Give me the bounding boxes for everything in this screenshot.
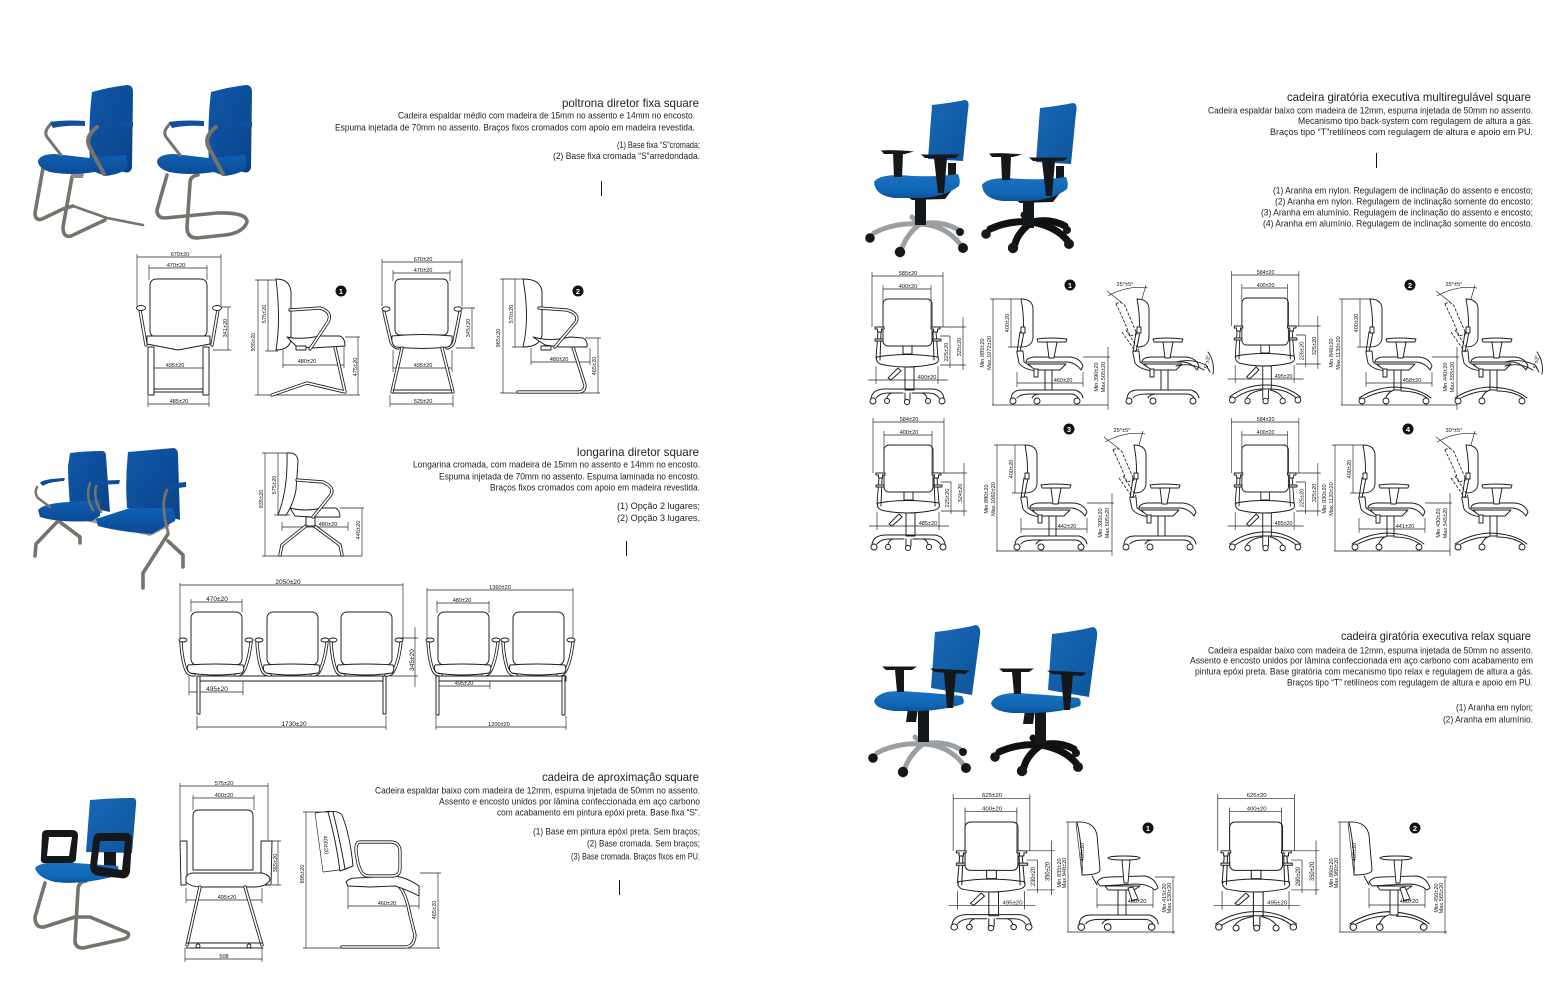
- badge relax 2: [1410, 822, 1420, 834]
- side view 2: Max.555±20: [1450, 362, 1456, 392]
- title: cadeira de aproximação square: [542, 770, 699, 784]
- technical drawing: side view: 400±20: [321, 835, 329, 854]
- badge: option 1: 1: [339, 287, 343, 296]
- badge relax 2: 2: [1413, 824, 1417, 833]
- side view 3: [984, 445, 1114, 556]
- options list: [1443, 702, 1533, 724]
- badge 2: [1404, 280, 1416, 290]
- options list: (1) Aranha em nylon. Regulagem de inclinação do assento e encosto;: [1273, 186, 1533, 196]
- front view 1: 400±20: [899, 284, 917, 290]
- recline view 4: 30°±5°: [1446, 428, 1462, 434]
- panel: cadeira giratória executiva multiregulável square: [865, 90, 1542, 556]
- photo: two-seat beam chair: [35, 448, 186, 588]
- technical drawing: side view: 935±20: [259, 490, 265, 508]
- photo: relax chair with nylon base: [990, 627, 1097, 776]
- title: cadeira giratória executiva relax square: [1341, 629, 1531, 643]
- technical drawing: side view: 465±20: [432, 901, 438, 919]
- side view 1: [980, 299, 1110, 410]
- side view 2: Max.1130±20: [1336, 336, 1342, 370]
- front view 1: 490±20: [918, 375, 936, 381]
- front view 2: 226±20: [1300, 342, 1306, 360]
- front view 3: 400±20: [900, 430, 918, 436]
- technical drawing: three-seat front view: 470±20: [206, 596, 228, 603]
- front view 4: 225±20: [1300, 489, 1306, 507]
- technical drawing: front view: 365±20: [273, 854, 279, 872]
- badge relax 1: 1: [1146, 824, 1150, 833]
- badge 2: 2: [1408, 281, 1412, 290]
- panel: longarina diretor square: [35, 445, 700, 730]
- front view 1: 585±20: [899, 271, 917, 277]
- badge 3: [1064, 424, 1074, 434]
- side view relax 2: Max.565±20: [1439, 883, 1445, 913]
- front view 2: 400±20: [1257, 283, 1274, 289]
- photo: swivel chair with nylon base: [981, 103, 1077, 253]
- recline view 4: [1436, 428, 1528, 550]
- technical drawing: front view, option 2: [382, 257, 475, 407]
- front view relax 1: 400±20: [982, 807, 1003, 813]
- technical drawing: front view, option 2: 470±20: [414, 268, 432, 274]
- technical drawing: front view: 508: [219, 954, 229, 960]
- description: com acabamento em pintura epóxi preta. Base fixa “S”.: [497, 808, 700, 818]
- options list: [553, 140, 700, 161]
- technical drawing: two-seat front view: 495±20: [455, 681, 473, 687]
- front view 2: 325±20: [1312, 337, 1318, 355]
- technical drawing: two-seat front view: 1360±20: [489, 585, 511, 591]
- side view 4: 400±20: [1347, 460, 1353, 478]
- options list: (2) Base cromada. Sem braços;: [587, 838, 700, 848]
- side view 4: Max.545±20: [1443, 508, 1449, 538]
- drawing set: option 3: [869, 417, 1196, 556]
- front view 1: 325±20: [957, 338, 963, 356]
- badge 4: [1402, 424, 1414, 434]
- side view relax 2: 400±20: [1352, 843, 1358, 861]
- recline view 3: [1104, 428, 1196, 550]
- technical drawing: two-seat front view: [426, 585, 575, 730]
- front view relax 1: [949, 793, 1055, 931]
- front view relax 2: 280±20: [1296, 866, 1302, 886]
- options list: (3) Aranha em alumínio. Regulagem de inclinação do assento e encosto;: [1261, 208, 1533, 218]
- side view relax 1: 400±20: [1080, 843, 1086, 861]
- front view relax 1: 350±20: [1045, 861, 1051, 881]
- recline view 2: [1436, 282, 1542, 404]
- description: Cadeira espaldar médio com madeira de 15mm no assento e 14mm no encosto.: [398, 110, 695, 120]
- title: longarina diretor square: [577, 445, 699, 459]
- front view relax 2: [1213, 793, 1319, 931]
- side view 1: 460±20: [1054, 378, 1072, 384]
- panel: poltrona diretor fixa square: [35, 85, 700, 407]
- photo: swivel chair with aluminium base: [865, 100, 969, 257]
- side view relax 2: Max.980±20: [1334, 858, 1340, 888]
- description: pintura epóxi preta. Base giratória com mecanismo tipo relax e regulagem de altura a gás.: [1195, 666, 1533, 676]
- photo: visitor chair with black loop arms: [35, 798, 136, 948]
- front view 4: [1228, 417, 1321, 551]
- badge: option 1: [336, 286, 346, 296]
- front view 4: 584±20: [1257, 417, 1274, 423]
- badge relax 1: [1142, 822, 1154, 834]
- front view relax 2: 625±20: [1247, 793, 1267, 799]
- front view relax 1: 495±20: [1003, 900, 1023, 906]
- description: Espuma injetada de 70mm no assento. Espuma laminada no encosto.: [439, 472, 700, 482]
- badge 1: 1: [1068, 281, 1072, 290]
- technical drawing: side view, option 1: 475±20: [353, 358, 359, 376]
- side view 2: Min.440±20: [1443, 362, 1449, 392]
- technical drawing: side view: 575±20: [272, 476, 278, 494]
- options list: (4) Aranha em alumínio. Regulagem de inclinação somente do encosto.: [1263, 218, 1533, 228]
- options list: (3) Base cromada. Braços fixos em PU.: [571, 852, 700, 862]
- side view 2: [1329, 299, 1459, 410]
- description: Assento e encosto unidos por lâmina confeccionada em aço carbono: [439, 796, 700, 806]
- description: Cadeira espaldar baixo com madeira de 12mm, espuma injetada de 50mm no assento.: [375, 786, 700, 796]
- technical drawing: side view: 445±20: [356, 521, 362, 539]
- side view relax 2: 460±20: [1400, 899, 1418, 905]
- technical drawing: side view: [259, 453, 364, 556]
- description: Longarina cromada, com madeira de 15mm no assento e 14mm no encosto.: [413, 460, 700, 470]
- front view relax 2: 400±20: [1247, 807, 1267, 813]
- recline view 1: 25°±5°: [1117, 282, 1133, 288]
- technical drawing: side view, option 1: 935±20: [251, 333, 257, 351]
- technical drawing: front view: [180, 781, 281, 962]
- technical drawing: side view, option 1: [251, 279, 360, 395]
- technical drawing: front view: 400±20: [215, 793, 233, 799]
- side view 2: 458±20: [1403, 378, 1421, 384]
- technical drawing: side view: 895±20: [300, 865, 306, 883]
- side view 4: [1322, 445, 1452, 556]
- technical drawing: two-seat front view: 480±20: [453, 598, 471, 604]
- side view 3: 442±20: [1058, 524, 1076, 530]
- front view 3: 584±20: [900, 417, 918, 423]
- description: Espuma injetada de 70mm no assento. Braços fixos cromados com apoio em madeira revestida.: [335, 122, 695, 132]
- side view relax 2: Min.860±20: [1329, 858, 1335, 888]
- description: Assento e encosto unidos por lâmina confeccionada em aço carbono com acabamento em: [1190, 656, 1533, 666]
- technical drawing: front view, option 1: [136, 252, 231, 407]
- side view 2: 400±20: [1354, 314, 1360, 332]
- side view 3: Min.395±20: [1098, 508, 1104, 538]
- technical drawing: front view, option 1: 670±20: [171, 252, 189, 258]
- technical drawing: two-seat front view: 1200±20: [488, 722, 510, 728]
- technical drawing: side view, option 1: 480±20: [298, 359, 316, 365]
- technical drawing: front view, option 2: 345±20: [466, 319, 472, 337]
- side view 4: Min.930±20: [1322, 484, 1328, 514]
- technical drawing: side view, option 2: 465±20: [592, 357, 598, 375]
- side view 3: Max.1060±20: [991, 482, 997, 516]
- description: Mecanismo tipo back-system com regulagem de altura a gás.: [1298, 116, 1533, 126]
- technical drawing: side view: 460±20: [378, 901, 396, 907]
- front view 3: 485±20: [919, 521, 937, 527]
- recline view 1: [1107, 282, 1213, 404]
- side view 1: Min.390±20: [1094, 362, 1100, 392]
- side view 1: Max.1072±20: [987, 336, 993, 370]
- badge: option 2: 2: [576, 287, 580, 296]
- technical drawing: side view, option 2: [496, 279, 601, 393]
- description: Braços tipo “T”retilíneos com regulagem de altura e apoio em PU.: [1270, 127, 1533, 137]
- drawing set: option 1: [868, 271, 1213, 410]
- title: poltrona diretor fixa square: [562, 96, 699, 110]
- options list: (1) Base fixa “S”cromada;: [617, 140, 700, 150]
- side view 1: 400±20: [1005, 314, 1011, 332]
- front view relax 1: 230±20: [1031, 866, 1037, 886]
- technical drawing: side view, option 1: 575±20: [262, 305, 268, 323]
- badge: option 2: [572, 286, 584, 296]
- front view 3: 324±20: [958, 484, 964, 502]
- photo: chair with S base: [35, 85, 143, 236]
- badge 1: [1064, 280, 1076, 290]
- description: [413, 460, 700, 492]
- front view relax 1: 625±20: [982, 793, 1003, 799]
- technical drawing: front view, option 2: 495±20: [414, 363, 432, 369]
- technical drawing: side view: [300, 811, 441, 948]
- technical drawing: side view: 480±20: [319, 522, 337, 528]
- front view 3: 225±20: [945, 489, 951, 507]
- side view 4: 441±20: [1396, 524, 1414, 530]
- options list: (2) Base fixa cromada “S”arredondada.: [553, 151, 700, 161]
- technical drawing: side view, option 2: 480±20: [550, 357, 568, 363]
- technical drawing: front view, option 2: 525±20: [414, 399, 432, 405]
- front view 2: 584±20: [1257, 270, 1274, 276]
- options list: (2) Opção 3 lugares.: [617, 513, 700, 523]
- description: Braços tipo “T” retilíneos com regulagem de altura e apoio em PU.: [1287, 678, 1533, 688]
- technical drawing: front view, option 2: 670±20: [414, 257, 432, 263]
- technical drawing: front view: 495±20: [218, 895, 236, 901]
- front view 2: [1228, 270, 1321, 404]
- technical drawing: three-seat front view: [179, 579, 418, 730]
- front view 1: 225±20: [944, 343, 950, 361]
- side view 3: 400±20: [1009, 460, 1015, 478]
- options list: (1) Opção 2 lugares;: [617, 501, 700, 511]
- technical drawing: front view, option 1: 485±20: [170, 399, 188, 405]
- front view relax 2: 350±20: [1310, 861, 1316, 881]
- options list: (2) Aranha em alumínio.: [1443, 714, 1533, 724]
- title: cadeira giratória executiva multiregulável square: [1287, 90, 1531, 104]
- side view relax 1: Min.835±20: [1057, 858, 1063, 888]
- side view relax 1: Max.948±20: [1062, 858, 1068, 888]
- options list: [617, 501, 700, 523]
- options list: (1) Base em pintura epóxi preta. Sem braços;: [533, 826, 700, 836]
- front view 4: 325±20: [1312, 484, 1318, 502]
- panel: cadeira de aproximação square: [35, 770, 700, 962]
- recline view 2: 25°±5°: [1446, 282, 1462, 288]
- description: Cadeira espaldar baixo com madeira de 12mm, espuma injetada de 50mm no assento.: [1208, 106, 1533, 116]
- technical drawing: front view, option 1: 495±20: [166, 363, 184, 369]
- drawing set: option 2: [1228, 270, 1542, 410]
- side view relax 1: Min.415±20: [1162, 883, 1168, 913]
- front view 4: 400±20: [1257, 430, 1274, 436]
- side view 1: Min.885±20: [980, 338, 986, 368]
- description: Cadeira espaldar baixo com madeira de 12mm, espuma injetada de 50mm no assento.: [1208, 646, 1533, 656]
- badge 4: 4: [1406, 425, 1411, 434]
- options list: (2) Aranha em nylon. Regulagem de inclinação somente do encosto;: [1275, 196, 1533, 206]
- technical drawing: three-seat front view: 495±20: [206, 686, 228, 693]
- description: [1208, 106, 1533, 137]
- badge 3: 3: [1067, 425, 1071, 434]
- options list: [533, 826, 700, 862]
- front view 1: [868, 271, 966, 405]
- description: Braços fixos cromados com apoio em madeira revestida.: [490, 482, 700, 492]
- technical drawing: front view: 575±20: [215, 781, 233, 787]
- technical drawing: three-seat front view: 2050±20: [275, 579, 301, 586]
- front view 4: 485±20: [1275, 521, 1293, 527]
- side view 2: Min.846±20: [1329, 338, 1335, 368]
- technical drawing: three-seat front view: 345±20: [409, 649, 416, 671]
- technical drawing: three-seat front view: 1730±20: [281, 721, 307, 728]
- technical drawing: side view, option 2: 570±20: [509, 305, 515, 323]
- side view 3: Min.880±20: [984, 484, 990, 514]
- technical drawing: front view, option 1: 470±20: [167, 263, 185, 269]
- photo: relax chair with aluminium base: [868, 625, 980, 777]
- side view relax 2: [1329, 822, 1447, 934]
- front view relax 2: 495±20: [1267, 900, 1288, 906]
- panel: cadeira giratória executiva relax square: [868, 625, 1533, 934]
- description: [1190, 646, 1533, 688]
- recline view 1: 5°±3°: [1204, 355, 1212, 369]
- side view relax 1: Max.530±20: [1167, 883, 1173, 913]
- options list: (1) Aranha em nylon;: [1456, 702, 1533, 712]
- recline view 2: 5°±3°: [1533, 355, 1541, 369]
- recline view 3: 25°±5°: [1114, 428, 1130, 434]
- front view 3: [869, 417, 967, 551]
- technical drawing: front view, option 1: 341±20: [223, 319, 229, 337]
- photo: chair with rounded S base: [157, 85, 252, 238]
- side view relax 1: 460±20: [1128, 899, 1146, 905]
- side view 4: Min.430±20: [1436, 508, 1442, 538]
- drawing set: option 4: [1228, 417, 1528, 556]
- side view 1: Max.505±20: [1101, 362, 1107, 392]
- description: [335, 110, 695, 132]
- front view 2: 495±20: [1275, 374, 1293, 380]
- technical drawing: side view, option 2: 965±20: [496, 329, 502, 347]
- side view relax 1: [1057, 822, 1175, 934]
- side view 3: Max.505±20: [1105, 508, 1111, 538]
- side view 4: Max.1120±20: [1329, 482, 1335, 516]
- options list: [1261, 186, 1533, 228]
- side view relax 2: Min.450±20: [1434, 883, 1440, 913]
- description: [375, 786, 700, 818]
